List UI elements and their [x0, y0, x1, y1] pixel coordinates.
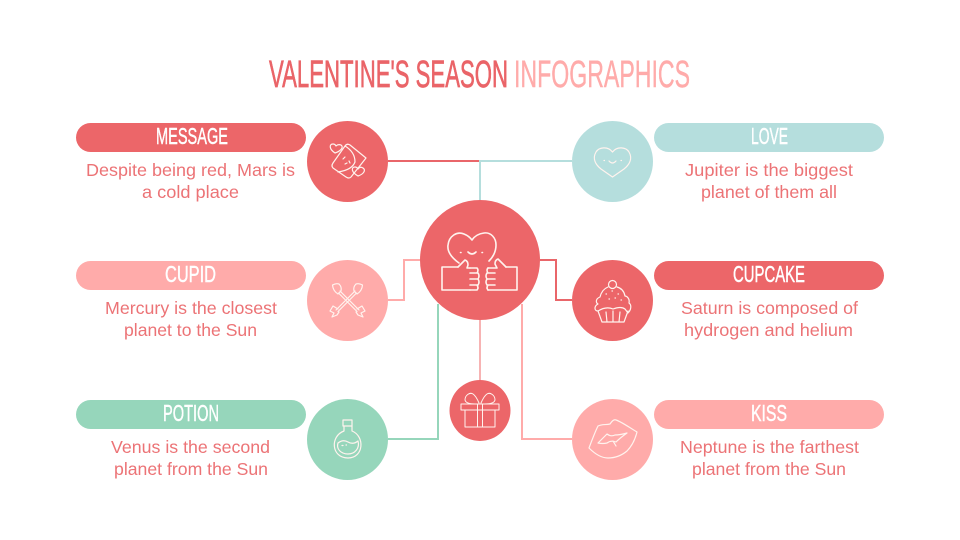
panel: central hub	[420, 200, 540, 320]
panel: gift	[450, 380, 510, 441]
hub circle	[420, 200, 540, 320]
panel: love	[572, 121, 884, 202]
connector: kiss	[522, 304, 572, 439]
icon: smiling heart	[594, 148, 631, 177]
panel: potion	[76, 399, 388, 480]
cupcake text: hydrogen and helium	[684, 320, 853, 340]
potion text	[111, 437, 270, 479]
title: VALENTINE'S SEASON	[269, 54, 508, 96]
message circle	[307, 121, 388, 202]
message heading: MESSAGE	[156, 123, 228, 149]
love heading: LOVE	[751, 123, 788, 149]
title: INFOGRAPHICS	[514, 54, 690, 96]
kiss heading	[654, 400, 884, 429]
kiss text: Neptune is the farthest	[680, 437, 859, 457]
connector: cupid	[388, 260, 420, 300]
icon: potion flask	[334, 420, 361, 458]
kiss text	[680, 437, 859, 479]
cupid heading	[76, 261, 306, 290]
message heading	[76, 123, 306, 152]
potion text: planet from the Sun	[114, 459, 268, 479]
connector: potion	[388, 304, 438, 439]
cupcake text	[681, 298, 858, 340]
connector: gift	[479, 318, 481, 381]
cupcake heading: CUPCAKE	[733, 261, 805, 287]
message text: Despite being red, Mars is	[86, 160, 295, 180]
potion heading	[76, 400, 306, 429]
love text: planet of them all	[701, 182, 837, 202]
connector: love	[480, 161, 572, 200]
kiss text: planet from the Sun	[692, 459, 846, 479]
icon: heart and thumbs up	[442, 233, 517, 290]
message text	[86, 160, 295, 202]
connector: cupcake	[540, 260, 572, 300]
potion heading: POTION	[163, 400, 219, 426]
love circle	[572, 121, 653, 202]
panel: kiss	[572, 399, 884, 480]
love text: Jupiter is the biggest	[685, 160, 853, 180]
cupid heading: CUPID	[165, 261, 216, 287]
cupid text	[105, 298, 277, 340]
cupcake text: Saturn is composed of	[681, 298, 858, 318]
kiss heading: KISS	[751, 400, 787, 426]
icon: crossed arrows	[330, 284, 365, 317]
potion circle	[307, 399, 388, 480]
cupid circle	[307, 260, 388, 341]
icon: cupcake	[595, 280, 631, 322]
cupcake heading	[654, 261, 884, 290]
panel: cupcake	[572, 260, 884, 341]
cupid text: planet to the Sun	[124, 320, 257, 340]
cupid text: Mercury is the closest	[105, 298, 277, 318]
love heading	[654, 123, 884, 152]
connector: message	[388, 160, 480, 162]
panel: cupid	[76, 260, 388, 341]
kiss circle	[572, 399, 653, 480]
icon: gift box	[461, 393, 499, 427]
cupcake circle	[572, 260, 653, 341]
icon: lips	[589, 420, 637, 458]
panel: message	[76, 121, 388, 202]
message text: a cold place	[142, 182, 239, 202]
gift circle	[450, 380, 510, 441]
icon: love letter	[330, 144, 366, 178]
potion text: Venus is the second	[111, 437, 270, 457]
love text	[685, 160, 853, 202]
